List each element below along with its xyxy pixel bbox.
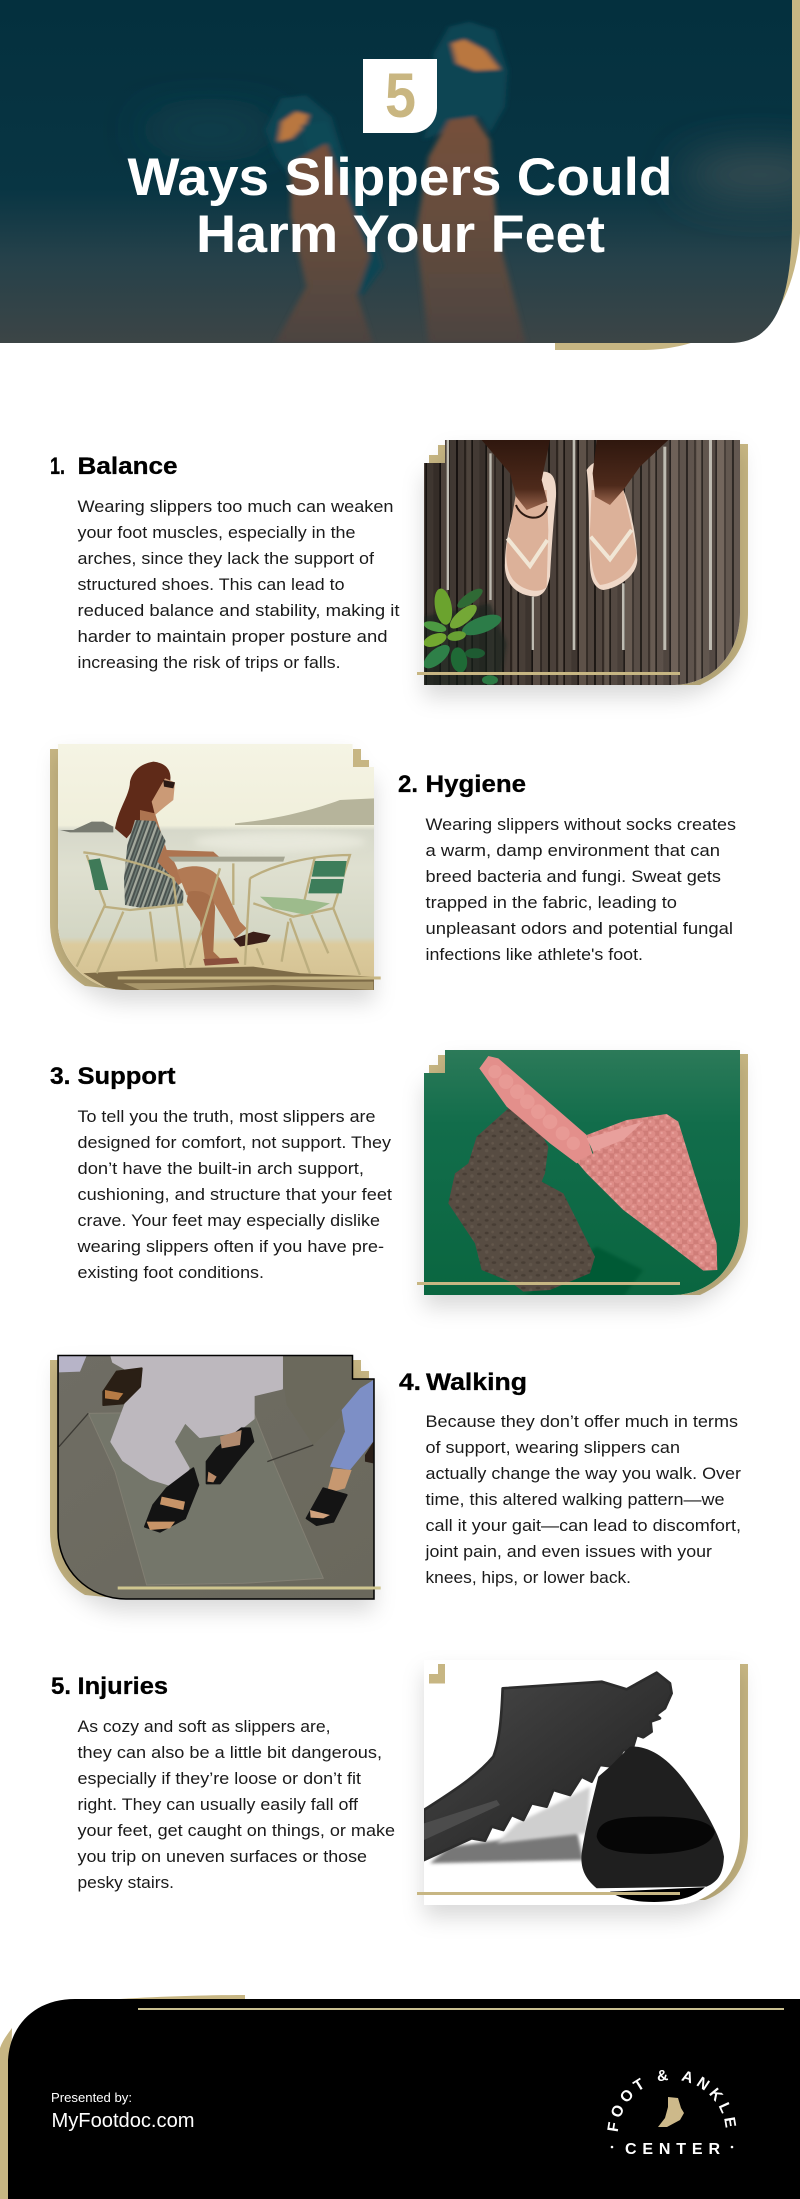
body text: injuries: right. They can usually easily fall off: [78, 1795, 358, 1814]
body text: support: crave. Your feet may especially dislike: [78, 1211, 380, 1230]
body text: balance: increasing the risk of trips or falls.: [78, 653, 340, 672]
body text: balance: reduced balance and stability, making it: [78, 601, 400, 620]
body text: hygiene: a warm, damp environment that can: [426, 841, 720, 860]
body text: hygiene: unpleasant odors and potential fungal: [426, 919, 733, 938]
heading: 5. Injuries: 5.: [51, 1673, 71, 1700]
panel: 2 hygiene: [50, 743, 736, 992]
heading: 3. Support: 3.: [50, 1063, 70, 1090]
body text: hygiene: infections like athlete's foot.: [426, 945, 643, 964]
body text: injuries: especially if they’re loose or don’t fit: [78, 1769, 361, 1788]
body text: walking: actually change the way you walk. Over: [426, 1464, 741, 1483]
body text: support: To tell you the truth, most slippers are: [78, 1107, 376, 1126]
body text: support: designed for comfort, not support. They: [78, 1133, 392, 1152]
panel: 1 balance: [50, 440, 748, 687]
body text: support: [76, 1107, 392, 1282]
body text: walking: [424, 1412, 741, 1587]
panel: 3 support: [50, 1050, 748, 1297]
heading: 4. Walking: Walking: [426, 1369, 527, 1396]
body text: walking: time, this altered walking pattern—we: [426, 1490, 724, 1509]
presented by: Presented by:: [51, 2091, 132, 2105]
body text: injuries: you trip on uneven surfaces or those: [78, 1847, 367, 1866]
header gold accent: [555, 0, 800, 350]
body text: injuries: As cozy and soft as slippers are,: [78, 1717, 330, 1736]
body text: balance: your foot muscles, especially in the: [78, 523, 356, 542]
body text: injuries: your feet, get caught on things, or make: [78, 1821, 395, 1840]
heading: 2. Hygiene: Hygiene: [426, 771, 526, 798]
heading: 5. Injuries: Injuries: [78, 1673, 168, 1700]
header photo: feet in slippers against sky: [0, 0, 800, 343]
heading: 1. Balance: Balance: [78, 453, 178, 480]
body text: balance: harder to maintain proper posture and: [78, 627, 388, 646]
body text: injuries: they can also be a little bit dangerous,: [78, 1743, 382, 1762]
body text: injuries: [78, 1717, 395, 1892]
heading: 2. Hygiene: 2.: [398, 771, 418, 798]
website: MyFootdoc.com: [52, 2110, 194, 2132]
body text: hygiene: breed bacteria and fungi. Sweat gets: [426, 867, 721, 886]
panel: 4 walking: [50, 1353, 741, 1602]
body text: hygiene: Wearing slippers without socks creates: [426, 815, 736, 834]
body text: support: cushioning, and structure that your feet: [78, 1185, 392, 1204]
photo: people walking in black sandals: [50, 1353, 381, 1602]
title: Ways Slippers Could: [128, 148, 672, 207]
body text: support: wearing slippers often if you have pre-: [76, 1237, 384, 1256]
body text: balance: Wearing slippers too much can weaken: [78, 497, 394, 516]
body text: hygiene: [426, 815, 736, 964]
title: [128, 148, 672, 264]
header banner: [0, 0, 800, 350]
heading: 1. Balance: 1.: [50, 453, 65, 480]
body text: balance: [78, 497, 400, 672]
logo: foot and ankle center: FOOT & ANKLE: [607, 2070, 736, 2132]
body text: walking: Because they don’t offer much in terms: [426, 1412, 738, 1431]
icon: foot: [658, 2097, 684, 2127]
body text: balance: structured shoes. This can lead to: [78, 575, 344, 594]
number badge: 5: [385, 61, 416, 131]
body text: walking: joint pain, and even issues with your: [424, 1542, 712, 1561]
photo: woman at beach table: [50, 743, 381, 992]
body text: walking: call it your gait—can lead to discomfort,: [426, 1516, 741, 1535]
body text: balance: arches, since they lack the support of: [78, 549, 374, 568]
footer gold accent: [0, 1995, 245, 2199]
title: Harm Your Feet: [196, 205, 605, 264]
body text: hygiene: trapped in the fabric, leading to: [426, 893, 677, 912]
heading: 4. Walking: 4.: [399, 1369, 421, 1396]
body text: walking: of support, wearing slippers can: [426, 1438, 680, 1457]
logo: foot and ankle center: CENTER: [625, 2141, 720, 2158]
heading: 3. Support: Support: [78, 1063, 176, 1090]
footer background: [8, 1999, 800, 2199]
body text: support: don’t have the built-in arch support,: [78, 1159, 364, 1178]
body text: walking: knees, hips, or lower back.: [426, 1568, 631, 1587]
number badge: [363, 59, 437, 133]
photo: black foam slides: [417, 1660, 748, 1905]
footer: [0, 1995, 800, 2199]
photo: pink bubble slipper on rock: [417, 1050, 748, 1297]
body text: injuries: pesky stairs.: [78, 1873, 174, 1892]
panel: 5 injuries: [51, 1660, 748, 1905]
photo: feet in flip-flops on wooden deck: [417, 440, 748, 687]
body text: support: existing foot conditions.: [78, 1263, 264, 1282]
logo: foot and ankle center: [607, 2070, 736, 2158]
